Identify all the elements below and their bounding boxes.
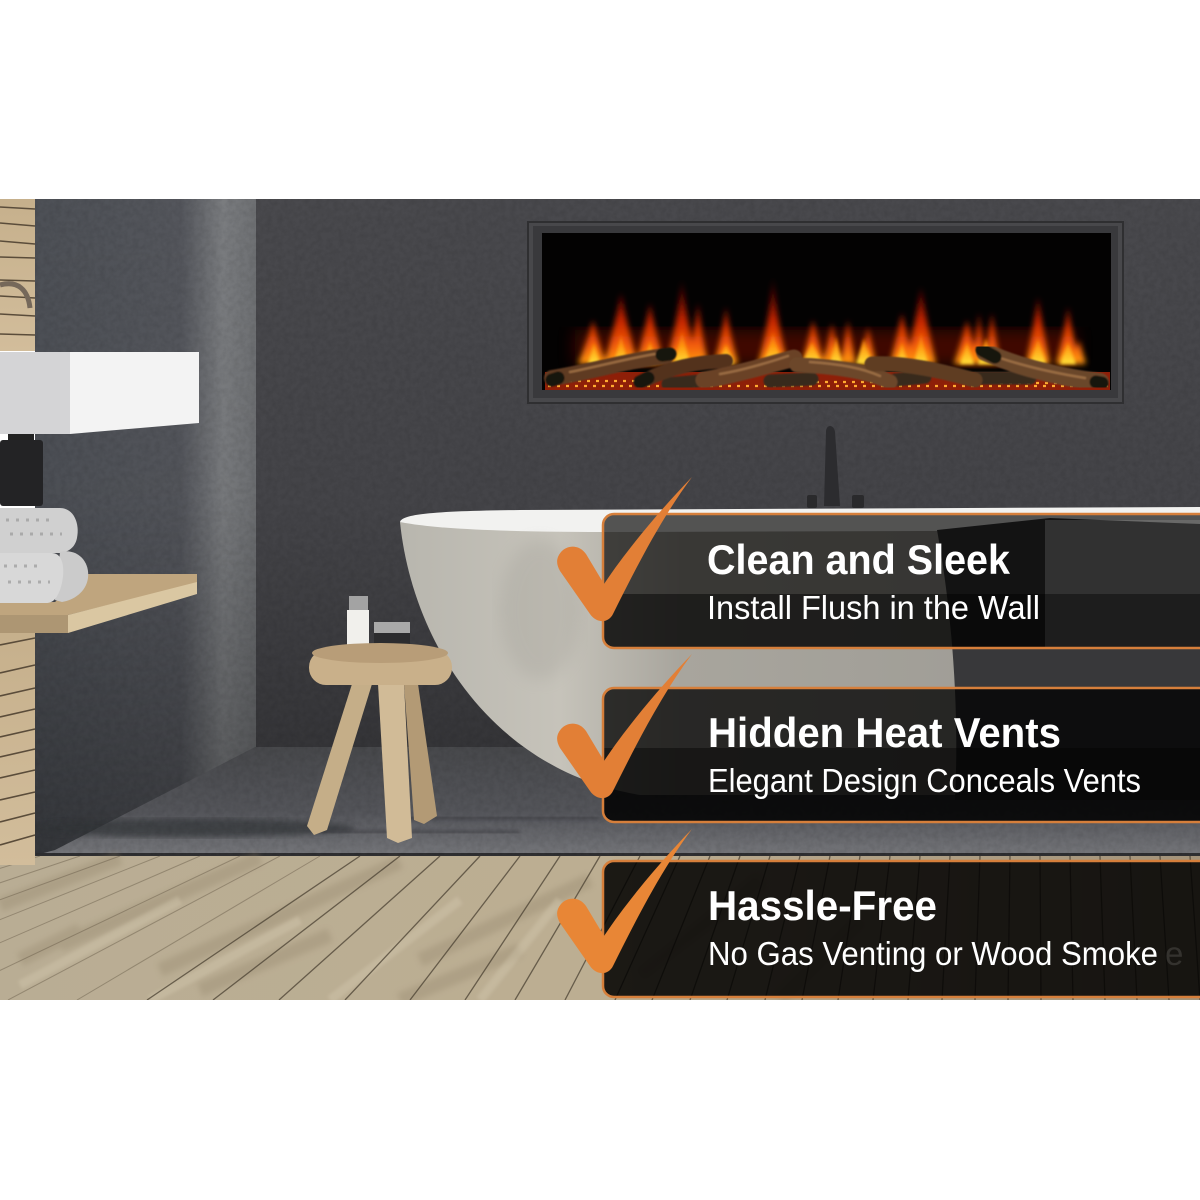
left side wall <box>35 199 256 859</box>
stool with bottle and jar <box>307 596 452 843</box>
ember bed <box>545 372 1110 390</box>
tall flames <box>578 277 1086 364</box>
panel 3 <box>603 861 1200 997</box>
panel 1 <box>603 514 1200 648</box>
jar <box>374 622 410 644</box>
wall mounted fireplace <box>527 221 1124 404</box>
plaster texture <box>35 199 1200 855</box>
bottle <box>347 596 369 644</box>
panel 2 heading: Hidden Heat Vents <box>708 709 1061 756</box>
panel 1 background <box>603 514 1200 648</box>
panel 2 <box>603 688 1200 822</box>
white sink <box>0 352 199 434</box>
panel 2 subheading: Elegant Design Conceals Vents <box>708 762 1141 799</box>
panel 1 border <box>603 514 1200 648</box>
panel 2 background <box>603 688 1200 822</box>
concrete floor <box>25 747 1200 856</box>
rolled towels <box>0 508 88 603</box>
panel 3 border <box>603 861 1200 997</box>
icon: check mark 3 <box>557 829 692 973</box>
faint ghost letter: e <box>1165 935 1183 972</box>
tub faucet <box>807 426 864 508</box>
panel 1 heading: Clean and Sleek <box>707 536 1011 583</box>
panel 3 background <box>603 861 1200 997</box>
panel 3 subheading: No Gas Venting or Wood Smoke <box>708 935 1158 972</box>
icon: check mark 1 <box>557 477 692 621</box>
slatted wood wall panel <box>0 199 35 865</box>
logs <box>552 350 1102 384</box>
bathtub <box>400 507 1200 795</box>
firebox <box>542 233 1111 390</box>
fireplace frame <box>527 221 1124 404</box>
bathroom scene photograph <box>0 199 1200 1000</box>
bright flames <box>588 330 1076 364</box>
stool seat <box>309 643 452 685</box>
panel 3 heading: Hassle-Free <box>708 882 937 929</box>
panel 2 border <box>603 688 1200 822</box>
wall faucet <box>0 284 30 308</box>
red glow <box>575 330 1075 365</box>
black soap dispenser <box>0 434 43 506</box>
wooden floor <box>0 856 1200 1000</box>
back wall <box>255 199 1200 759</box>
dark towel draped on tub <box>937 518 1200 800</box>
wooden shelf <box>0 574 197 633</box>
stool legs <box>307 684 437 843</box>
icon: check mark 2 <box>557 654 692 798</box>
panel 1 subheading: Install Flush in the Wall <box>707 589 1040 626</box>
